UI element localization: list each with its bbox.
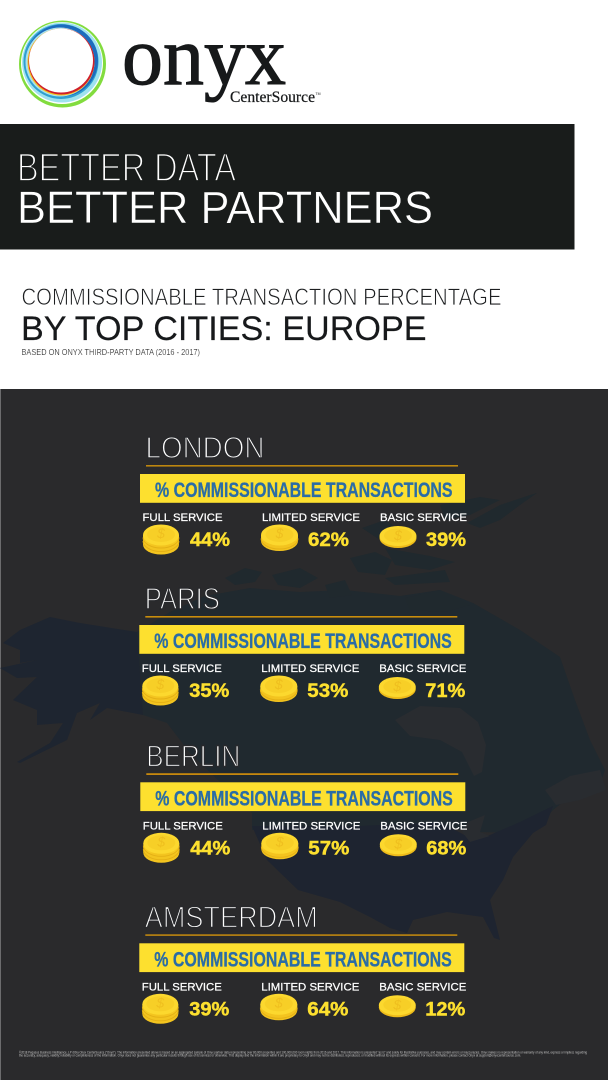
map: North America background — [0, 493, 606, 940]
Hudson Bay — [395, 706, 486, 776]
stat: full service: $ — [156, 525, 165, 541]
stat: full service: $ — [156, 833, 165, 849]
stat: full service: 39% — [189, 998, 229, 1020]
banner heading line 1: BETTER DATA — [17, 146, 236, 190]
title block — [21, 284, 502, 357]
stat: basic service: BASIC SERVICE — [380, 512, 467, 524]
wordmark: CenterSource: CenterSource — [230, 89, 315, 106]
logo — [19, 10, 321, 108]
stat: basic service — [379, 981, 466, 1020]
subtitle: BASED ON ONYX THIRD-PARTY DATA (2016 - 2017) — [22, 348, 200, 357]
footer disclaimer: the accuracy, adequacy, validity, reliability or completeness of the information. Onyx does not guarantee any particular results through use of its services or otherwise. This display and the information within it are proprietary to Onyx and may not be distributed, reproduced, or modified without its express written consent. For more information, please contact Onyx at support@onyxcentersource.com. — [19, 1054, 521, 1058]
stat: basic service: BASIC SERVICE — [379, 663, 466, 675]
stat: limited service: 57% — [308, 837, 349, 859]
yellow bar: % commissionable transactions — [140, 782, 465, 811]
stat: basic service: $ — [392, 678, 401, 694]
section: Berlin — [140, 738, 467, 863]
stat: basic service: 39% — [426, 529, 466, 551]
yellow bar: % commissionable transactions — [140, 474, 465, 503]
banner heading line 2: BETTER PARTNERS — [17, 182, 433, 233]
city heading: BERLIN: BERLIN — [146, 738, 240, 773]
yellow bar: % commissionable transactions: % COMMISSIONABLE TRANSACTIONS — [155, 786, 453, 810]
stat: basic service: 71% — [425, 680, 465, 702]
stat: full service: $ — [155, 994, 164, 1010]
section: Paris — [139, 581, 466, 706]
stat: limited service — [261, 820, 360, 859]
yellow bar: % commissionable transactions: % COMMISSIONABLE TRANSACTIONS — [155, 478, 452, 502]
stat: basic service: 12% — [425, 998, 465, 1020]
stat: basic service: 68% — [426, 837, 466, 859]
stat: full service: FULL SERVICE — [142, 981, 222, 993]
wordmark: onyx: onyx — [122, 10, 286, 103]
stat: limited service: 62% — [308, 529, 349, 551]
trademark: TM — [316, 92, 321, 96]
icon: onyx ring — [19, 20, 106, 108]
yellow bar: % commissionable transactions — [139, 943, 464, 972]
yellow bar: % commissionable transactions: % COMMISSIONABLE TRANSACTIONS — [154, 947, 452, 971]
stat: basic service: $ — [393, 835, 402, 851]
stat: limited service: LIMITED SERVICE — [262, 820, 360, 832]
stat: limited service: LIMITED SERVICE — [261, 981, 359, 993]
banner — [0, 124, 574, 250]
stat: limited service: $ — [274, 676, 283, 692]
stat: limited service: 53% — [307, 680, 348, 702]
yellow bar: % commissionable transactions: % COMMISSIONABLE TRANSACTIONS — [154, 629, 452, 653]
stat: basic service — [379, 663, 466, 702]
stat: basic service: $ — [392, 996, 401, 1012]
stat: basic service: $ — [393, 527, 402, 543]
stat: full service: FULL SERVICE — [143, 820, 223, 832]
Great Lakes — [462, 815, 490, 842]
title line 1: COMMISSIONABLE TRANSACTION PERCENTAGE — [22, 284, 502, 311]
city heading: PARIS: PARIS — [145, 581, 220, 616]
Gulf of St Lawrence — [545, 770, 606, 805]
stat: full service: 44% — [190, 837, 230, 859]
city heading: LONDON: LONDON — [146, 430, 264, 465]
section: Amsterdam — [139, 899, 466, 1024]
stat: limited service: LIMITED SERVICE — [262, 512, 360, 524]
section: London — [140, 430, 467, 554]
city heading: AMSTERDAM: AMSTERDAM — [145, 899, 318, 934]
USA — [252, 806, 553, 940]
stat: basic service: BASIC SERVICE — [380, 820, 467, 832]
yellow bar: % commissionable transactions — [139, 625, 464, 654]
stat: limited service: LIMITED SERVICE — [261, 663, 359, 675]
stat: full service: 35% — [189, 680, 229, 702]
stat: limited service: $ — [275, 525, 284, 541]
stat: limited service: $ — [274, 994, 283, 1010]
Canada — [137, 588, 605, 833]
stat: full service: FULL SERVICE — [142, 663, 222, 675]
title line 2: BY TOP CITIES: EUROPE — [21, 310, 426, 348]
stat: full service — [142, 981, 229, 1024]
stat: limited service — [261, 512, 360, 551]
stat: full service: FULL SERVICE — [142, 512, 222, 524]
stat: limited service: 64% — [307, 998, 348, 1020]
stat: basic service — [380, 820, 467, 859]
panel: dark city panel — [0, 389, 608, 1080]
stat: full service — [142, 663, 229, 706]
stat: basic service — [380, 512, 467, 551]
stat: full service — [142, 512, 230, 554]
stat: basic service: BASIC SERVICE — [379, 981, 466, 993]
stat: full service: $ — [155, 676, 164, 692]
stat: limited service — [260, 981, 359, 1020]
Arctic islands — [225, 493, 537, 612]
footer disclaimer — [19, 1050, 587, 1058]
stat: full service: 44% — [190, 529, 230, 551]
stat: limited service: $ — [275, 833, 284, 849]
Alaska — [0, 617, 143, 763]
stat: limited service — [260, 663, 359, 702]
stat: full service — [143, 820, 230, 863]
